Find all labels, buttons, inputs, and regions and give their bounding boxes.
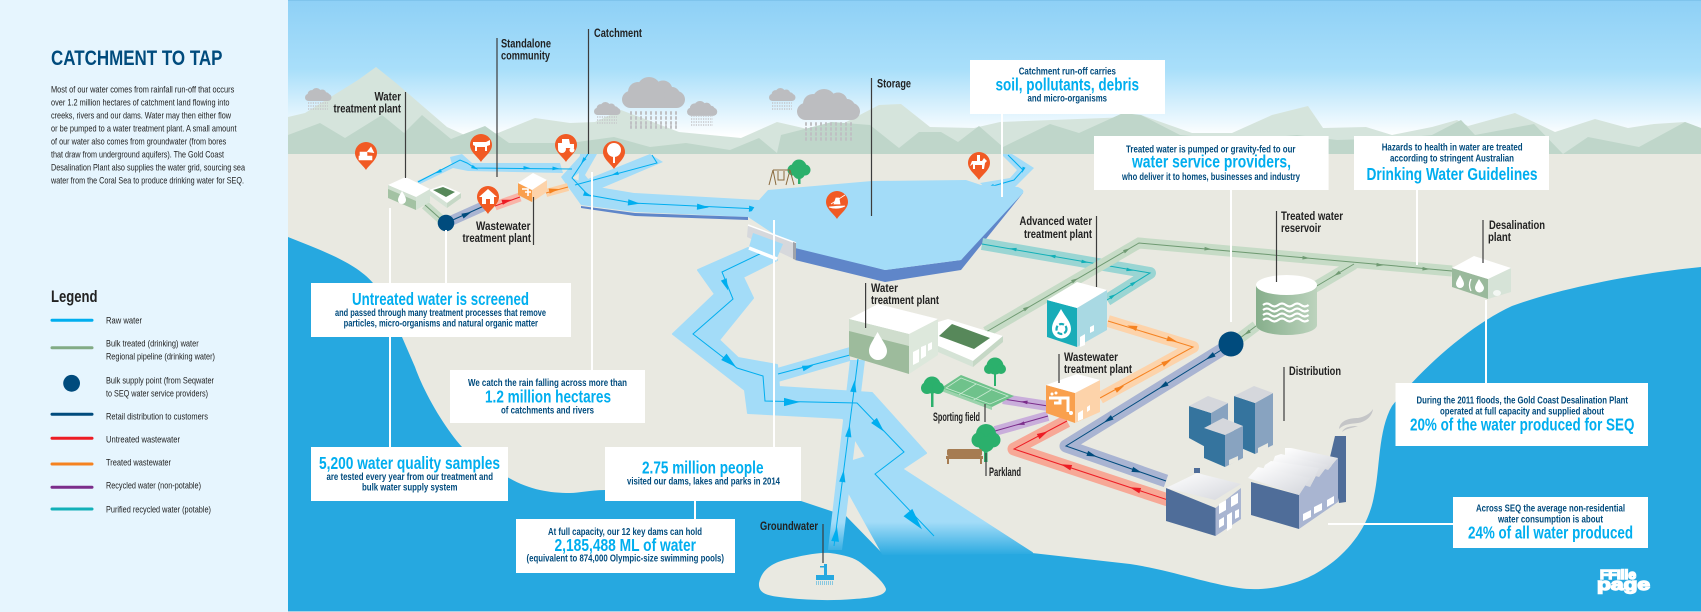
label: distribution [1284, 366, 1341, 421]
intro text block: water from the Coral Sea to produce drinking water for SEQ. [50, 176, 244, 187]
pipeline: recycled water [995, 399, 1048, 431]
pin: house [477, 186, 499, 214]
callout: drinking water guidelines [1354, 136, 1549, 190]
icon: swing [769, 170, 794, 185]
intro text block [50, 85, 246, 187]
intro text block: creeks, rivers and our dams. Water may then either flow [51, 111, 231, 122]
label: water treatment plant centre: Water [871, 283, 898, 295]
icon: left wastewater treatment plant [518, 173, 547, 202]
dam [747, 225, 796, 260]
legend: to SEQ water service providers) [106, 389, 208, 399]
legend: Retail distribution to customers [106, 412, 208, 422]
callout: water service providers: Treated water is pumped or gravity-fed to our [1126, 145, 1296, 156]
logo [1597, 567, 1650, 594]
icon: centre water treatment plant [849, 304, 1003, 374]
label: wastewater treatment plant centre [1059, 352, 1132, 383]
logo: FFIlle [1600, 567, 1636, 582]
label: treated water reservoir [1276, 211, 1343, 282]
legend: Purified recycled water (potable) [106, 505, 211, 515]
label: catchment: Catchment [594, 28, 642, 40]
icon: centre wastewater treatment plant [1046, 374, 1100, 423]
callout: 2.75 million people: 2.75 million people [642, 458, 764, 478]
legend: Bulk supply point (from Seqwater [106, 376, 214, 386]
label: standalone community [497, 38, 551, 177]
label: wastewater treatment plant left [462, 197, 534, 245]
legend: Raw water [106, 315, 142, 325]
legend: Treated wastewater [106, 458, 171, 468]
callout: drinking water guidelines: Hazards to health in water are treated [1382, 143, 1523, 154]
callout: non-residential consumption [1453, 497, 1648, 548]
callout: catchment run-off: soil, pollutants, debris [996, 75, 1139, 95]
intro text block: of our water also comes from groundwater (from bores [51, 137, 226, 148]
callout: drinking water guidelines: Drinking Water Guidelines [1366, 164, 1538, 184]
pin: tractor [555, 134, 577, 162]
label: treated water reservoir: reservoir [1281, 223, 1321, 235]
label: treated water reservoir: Treated water [1281, 211, 1343, 223]
callout: catchment run-off [970, 60, 1165, 114]
callout: untreated water is screened [311, 283, 571, 337]
callout: desalination floods: 20% of the water produced for SEQ [1410, 415, 1634, 435]
sea [288, 154, 1701, 612]
sky [288, 0, 1701, 155]
legend: Untreated wastewater [106, 435, 180, 445]
connector lines: white callout leaders [390, 114, 1486, 524]
icon: trees [788, 160, 1006, 462]
callout: desalination floods [1396, 383, 1648, 446]
callout: water quality samples: are tested every year from our treatment and [326, 472, 493, 483]
callout: water quality samples: 5,200 water quality samples [319, 453, 500, 473]
river: upper catchment raw water [417, 154, 1034, 220]
legend: Bulk treated (drinking) water [106, 339, 199, 349]
label: advanced water treatment plant: treatment plant [1024, 229, 1092, 241]
clouds and rain [305, 77, 860, 139]
mountains: front range [288, 113, 1701, 155]
callout: water service providers: who deliver it to homes, businesses and industry [1121, 172, 1300, 183]
panel: left sidebar [0, 0, 288, 612]
callout: dam capacity: 2,185,488 ML of water [554, 535, 696, 555]
label: catchment [588, 28, 642, 154]
label: standalone community: community [501, 50, 550, 62]
callout: drinking water guidelines: according to stringent Australian [1390, 154, 1514, 165]
legend: Recycled water (non-potable) [106, 481, 201, 491]
callout: desalination floods: operated at full capacity and supplied about [1440, 407, 1605, 418]
icon: treated water reservoir [1256, 275, 1317, 335]
island: groundwater [759, 553, 886, 600]
label: water treatment plant centre [866, 283, 939, 328]
callout: untreated water is screened: Untreated water is screened [352, 289, 529, 309]
intro text block: Desalination Plant also supplies the water grid, sourcing sea [51, 163, 246, 174]
label: sporting field [933, 404, 985, 424]
label: parkland [986, 453, 1021, 479]
label: water treatment plant left: Water [374, 92, 401, 104]
label: wastewater treatment plant left: treatment plant [462, 233, 531, 245]
callout: 1.2 million hectares: of catchments and rivers [501, 406, 594, 417]
pin: tree [603, 141, 625, 169]
pipeline: treated wastewater [1100, 321, 1193, 398]
callout: dam capacity: (equivalent to 874,000 Olympic-size swimming pools) [526, 554, 724, 565]
pipeline: purified recycled water [982, 244, 1150, 300]
label: wastewater treatment plant centre: treatment plant [1064, 364, 1132, 376]
label: wastewater treatment plant left: Wastewater [476, 221, 531, 233]
pin: horse [968, 152, 990, 180]
intro text block: over 1.2 million hectares of catchment land flowing into [51, 98, 230, 109]
label: wastewater treatment plant centre: Wastewater [1064, 352, 1118, 364]
intro text block: or be pumped to a water treatment plant. A small amount [51, 124, 237, 135]
label: groundwater: Groundwater [760, 521, 818, 533]
bulk supply point left [438, 215, 454, 231]
icon: desalination plant [1452, 256, 1511, 299]
callout: non-residential consumption: 24% of all water produced [1468, 523, 1633, 543]
label: water treatment plant centre: treatment plant [871, 295, 939, 307]
pin: excavator [355, 142, 377, 170]
label: distribution: Distribution [1289, 366, 1341, 378]
mountains: back range [288, 67, 1701, 155]
callout: water quality samples [311, 447, 508, 501]
icon: tall buildings [1189, 386, 1273, 467]
pipeline: retail distribution [1066, 344, 1231, 481]
river: below dam to sea [673, 248, 1032, 554]
callout: 1.2 million hectares [450, 370, 645, 423]
label: water treatment plant left: treatment plant [334, 104, 401, 116]
callout: untreated water is screened: and passed through many treatment processes that remove [335, 308, 546, 319]
callout: catchment run-off: Catchment run-off carries [1019, 67, 1116, 78]
callout: 1.2 million hectares: We catch the rain falling across more than [468, 378, 627, 389]
callout: water service providers [1094, 136, 1329, 190]
label: storage: Storage [877, 78, 911, 90]
label: desalination plant [1483, 220, 1545, 263]
land [288, 154, 1701, 589]
callout: dam capacity [516, 519, 735, 573]
callout: non-residential consumption: water consumption is about [1497, 515, 1604, 526]
pin: cow [470, 134, 492, 162]
callout: dam capacity: At full capacity, our 12 key dams can hold [548, 527, 702, 538]
callout: water service providers: water service providers, [1131, 152, 1291, 172]
icon: advanced water treatment plant [1047, 282, 1107, 347]
icon: house [1166, 468, 1241, 536]
callout: 1.2 million hectares: 1.2 million hectares [485, 387, 611, 407]
intro text block: that draw from underground aquifers). The Gold Coast [51, 150, 224, 161]
icon: bore [816, 564, 834, 584]
label: advanced water treatment plant: Advanced water [1020, 216, 1092, 228]
label: desalination plant: Desalination [1489, 220, 1545, 232]
callout: water quality samples: bulk water supply system [362, 483, 458, 494]
label: water treatment plant left [334, 92, 406, 178]
callout: 2.75 million people: visited our dams, lakes and parks in 2014 [627, 476, 780, 487]
pipeline: untreated wastewater [1014, 421, 1168, 500]
icon: left water treatment plant [388, 177, 461, 210]
label: advanced water treatment plant [1020, 216, 1096, 287]
icon: sporting field [941, 375, 1014, 410]
label: desalination plant: plant [1488, 232, 1511, 244]
callout: desalination floods: During the 2011 floods, the Gold Coast Desalination Plant [1416, 396, 1629, 407]
label: parkland: Parkland [989, 467, 1021, 479]
bulk supply point right [1218, 332, 1244, 356]
icon: bench [946, 449, 983, 464]
lake: storage [748, 180, 1023, 282]
callout: untreated water is screened: particles, micro-organisms and natural organic matter [344, 319, 538, 330]
label: storage [872, 78, 911, 216]
legend [51, 288, 215, 515]
pipelines: standalone community [425, 186, 568, 223]
title: CATCHMENT TO TAP [51, 46, 222, 70]
intro text block: Most of our water comes from rainfall run-off that occurs [51, 85, 234, 96]
label: standalone community: Standalone [501, 39, 551, 51]
label: sporting field: Sporting field [933, 412, 980, 424]
pipeline: bulk treated drinking water [986, 243, 1452, 338]
legend: Regional pipeline (drinking water) [106, 352, 215, 362]
icon: factory [1248, 409, 1373, 529]
pin: kayak [826, 191, 848, 219]
legend: Legend [51, 288, 98, 306]
callout: non-residential consumption: Across SEQ the average non-residential [1476, 504, 1625, 515]
label: groundwater [760, 521, 823, 563]
callout: catchment run-off: and micro-organisms [1028, 93, 1107, 104]
callout: 2.75 million people [605, 447, 801, 501]
logo: page [1597, 575, 1650, 594]
